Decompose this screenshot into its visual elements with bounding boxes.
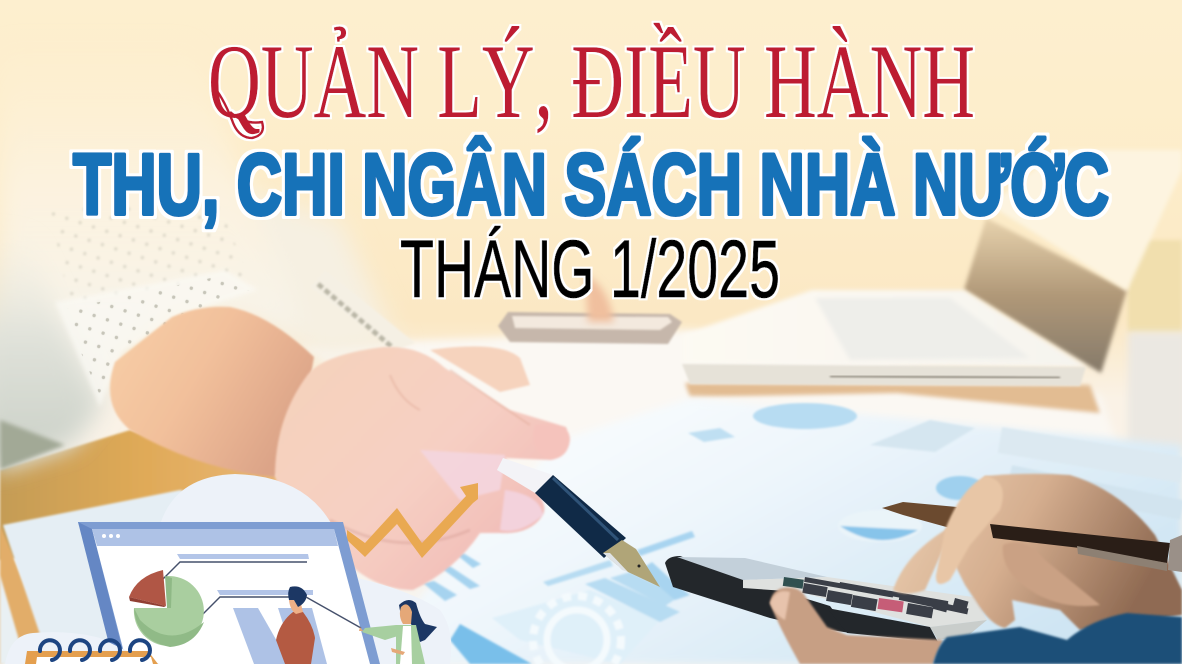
paper chart marks: [423, 403, 1182, 664]
right hand: [893, 474, 1182, 630]
illustration: presentation board with people: [5, 474, 478, 664]
laptop keyboard: [815, 298, 1030, 360]
forearm: [110, 307, 314, 477]
dotted fabric: [50, 195, 250, 407]
chart labels: [177, 554, 309, 559]
grey shirt side: [0, 230, 100, 468]
wood table left: [0, 430, 290, 560]
board header bar: [92, 529, 338, 546]
board screen: [92, 529, 370, 664]
calculator: [665, 556, 987, 642]
laptop deck: [682, 290, 1086, 367]
calendar icon: [5, 632, 160, 664]
board frame: [78, 522, 380, 664]
rising zigzag arrow: [347, 483, 478, 558]
blue sleeve: [933, 613, 1182, 664]
cuff: [55, 270, 258, 407]
pointer stick: [306, 597, 361, 628]
white paper left: [3, 490, 330, 664]
man presenter: [276, 586, 315, 664]
fountain pen lower: [497, 458, 660, 587]
laptop base front: [682, 364, 1086, 386]
cloud behind board: [160, 474, 332, 525]
desk light: [300, 330, 1130, 480]
finger behind index: [430, 346, 530, 392]
pen upper: [310, 270, 415, 350]
writing hand: [275, 347, 570, 590]
wood under laptop: [685, 383, 1100, 413]
laptop lid back: [964, 218, 1127, 373]
shirt behind: [240, 190, 400, 360]
fountain pen in right hand: [882, 502, 1182, 572]
laptop lid edge white: [990, 150, 1182, 291]
index finger: [936, 476, 1003, 584]
bars behind man: [233, 608, 290, 664]
blue stripes: [423, 581, 457, 601]
cloud behind woman: [353, 577, 451, 664]
lavender reflection under index finger: [420, 450, 505, 500]
woman presenter: [359, 600, 437, 664]
lower hand holding calculator: [770, 588, 943, 664]
documents paper: [360, 398, 1182, 664]
title line 3: date: THÁNG 1/2025: [400, 224, 780, 315]
pie chart: [134, 576, 204, 646]
phone on desk: [498, 312, 682, 344]
sleeve: [0, 40, 300, 470]
right wall and table: [1128, 240, 1182, 332]
